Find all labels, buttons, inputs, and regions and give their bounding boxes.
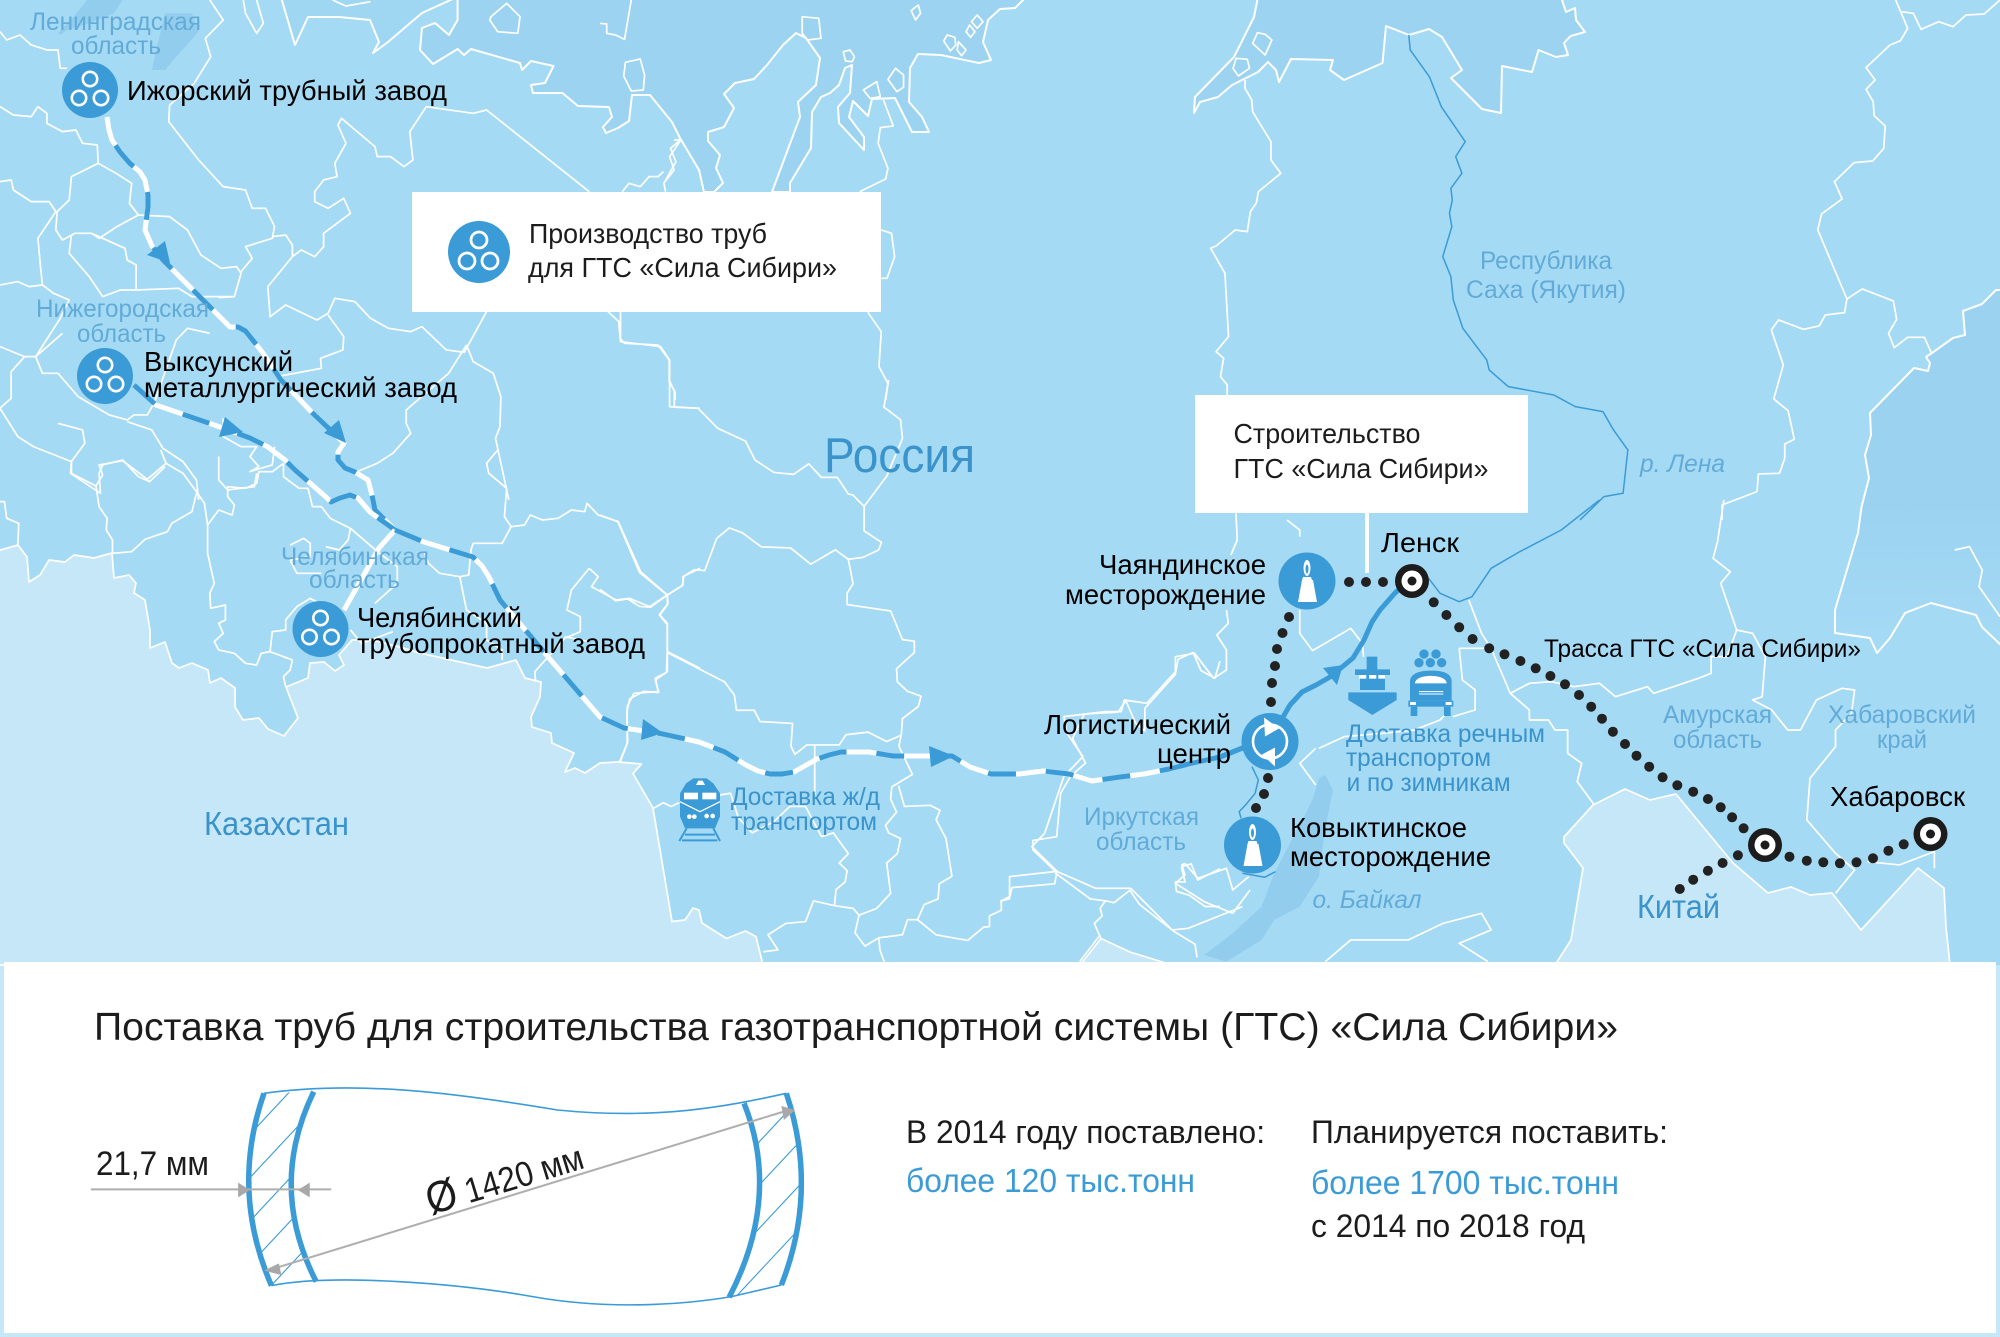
label: logistics centre: Логистический [1044, 709, 1231, 740]
label: Chelyabinsk pipe plant: трубопрокатный завод [357, 628, 645, 659]
label: lake Baikal: о. Байкал [1312, 886, 1422, 914]
label: river and winter road delivery: транспортом [1346, 744, 1491, 772]
label: rail delivery: транспортом [731, 808, 877, 836]
gas pipeline route dots [1251, 577, 1909, 894]
panel heading: Поставка труб для строительства газотранспортной системы (ГТС) «Сила Сибири» [94, 1006, 1618, 1049]
panel: pipe supply [4, 962, 1996, 1337]
stat: planned deliveries [1311, 1114, 1668, 1244]
label: Chayanda field: месторождение [1065, 579, 1266, 610]
icon: logistics centre [1242, 713, 1298, 770]
pipe cross-section diagram: Ø 1420 мм [420, 1130, 589, 1225]
label: rail delivery: Доставка ж/д [731, 783, 880, 811]
seas [281, 0, 2000, 653]
label: Vyksa steel works: металлургический завод [144, 372, 457, 403]
stat: delivered in 2014: В 2014 году поставлено: [906, 1114, 1265, 1150]
label: Kazakhstan: Казахстан [204, 805, 349, 842]
label: Leningrad region: область [71, 32, 161, 60]
label: Khabarovsk territory [1828, 701, 1976, 754]
route arrows [147, 241, 954, 767]
label: river and winter road delivery: и по зимникам [1347, 769, 1511, 797]
label: Khabarovsk territory: Хабаровский [1828, 701, 1976, 729]
label: pipeline route: Трасса ГТС «Сила Сибири» [1544, 635, 1861, 663]
label: Kovykta field: Ковыктинское [1290, 812, 1467, 843]
label: Chelyabinsk region [281, 543, 429, 594]
label: Chelyabinsk region: область [309, 566, 400, 594]
callout: pipeline construction: ГТС «Сила Сибири» [1234, 453, 1488, 484]
label: Leningrad region: Ленинградская [30, 8, 201, 36]
pipeline from Chelyabinsk plant [344, 530, 395, 610]
label: Russia: Россия [824, 429, 975, 483]
label: Izhora pipe plant: Ижорский трубный завод [127, 75, 447, 106]
label: Leningrad region [30, 8, 201, 60]
label: China: Китай [1637, 888, 1720, 925]
label: Khabarovsk territory: край [1877, 726, 1927, 754]
pipeline from Vyksa plant [134, 385, 395, 530]
icon: river ship [1348, 657, 1397, 715]
icon: pipe truck [1408, 649, 1453, 716]
river delivery route [1283, 585, 1404, 717]
stat: delivered in 2014: более 120 тыс.тонн [906, 1162, 1195, 1199]
marker: Khabarovsk [1914, 817, 1948, 851]
region borders central Siberia [600, 380, 1220, 963]
label: Vyksa steel works [144, 346, 457, 403]
label: Sakha Republic: Саха (Якутия) [1466, 276, 1626, 304]
icon: Izhora plant pipes [62, 62, 118, 118]
label: Chelyabinsk pipe plant: Челябинский [357, 602, 522, 633]
icon: Kovykta gas field [1224, 816, 1281, 874]
pipe cross-section diagram: 21,7 мм [96, 1145, 209, 1183]
pipe cross-section diagram [90, 1087, 804, 1306]
label: Lensk: Ленск [1381, 527, 1460, 558]
river Lena lower course [1239, 500, 1600, 877]
label: Amur region [1663, 701, 1772, 754]
label: Chayanda field: Чаяндинское [1099, 549, 1266, 580]
label: Amur region: Амурская [1663, 701, 1772, 729]
label: Chelyabinsk region: Челябинская [281, 543, 429, 571]
callout: pipe production [412, 192, 881, 312]
region borders Urals [0, 450, 700, 762]
label: logistics centre: центр [1157, 738, 1231, 769]
callout: pipe production: для ГТС «Сила Сибири» [528, 252, 837, 283]
map background [0, 0, 2000, 965]
callout: pipe production: Производство труб [529, 218, 767, 249]
lake Baikal [1204, 775, 1333, 962]
region borders north and islands [600, 0, 1281, 400]
China area [1555, 789, 1950, 965]
marker: China branch junction [1748, 828, 1782, 862]
stat: planned deliveries: более 1700 тыс.тонн [1311, 1164, 1619, 1201]
label: Amur region: область [1673, 726, 1762, 754]
river Lena upper course [1409, 35, 1628, 520]
icon: train [679, 778, 720, 841]
label: Chelyabinsk pipe plant [357, 602, 645, 659]
label: Nizhny Novgorod region: Нижегородская [36, 295, 209, 323]
label: Sakha Republic [1466, 247, 1626, 304]
label: Khabarovsk: Хабаровск [1830, 781, 1966, 812]
label: river and winter road delivery: Доставка речным [1346, 720, 1545, 748]
label: Kovykta field: месторождение [1290, 841, 1491, 872]
Mongolia area [1080, 938, 1172, 965]
label: Irkutsk region: Иркутская [1084, 803, 1199, 831]
stat: planned deliveries: Планируется поставить: [1311, 1114, 1668, 1150]
label: logistics centre [1044, 709, 1231, 769]
label: Vyksa steel works: Выксунский [144, 346, 293, 377]
icon: Chayanda gas field [1278, 552, 1336, 610]
trunk pipeline to logistics centre [395, 530, 1245, 781]
label: Irkutsk region: область [1096, 828, 1186, 856]
lakes Ladoga and Onega [58, 0, 199, 70]
icon: Chelyabinsk plant pipes [292, 601, 348, 657]
region borders far east [1000, 500, 2000, 962]
pipeline from Izhora plant [107, 117, 395, 530]
icon: Vyksa plant pipes [77, 348, 133, 404]
region borders Yakutia [1722, 0, 2000, 520]
label: Chayanda field [1065, 549, 1266, 610]
label: Sakha Republic: Республика [1480, 247, 1612, 275]
label: Lena river: р. Лена [1639, 450, 1725, 478]
Kazakhstan area [0, 545, 763, 965]
stat: delivered in 2014 [906, 1114, 1265, 1199]
label: Kovykta field [1290, 812, 1491, 872]
label: river and winter road delivery [1346, 720, 1545, 797]
marker: Lensk [1395, 564, 1429, 598]
callout: pipeline construction [1195, 395, 1528, 573]
label: rail delivery [731, 783, 880, 836]
stat: planned deliveries: с 2014 по 2018 год [1311, 1208, 1585, 1244]
label: Irkutsk region [1084, 803, 1199, 856]
label: Nizhny Novgorod region: область [77, 320, 166, 348]
callout: pipeline construction: Строительство [1234, 418, 1420, 449]
region borders west [0, 0, 700, 500]
label: Nizhny Novgorod region [36, 295, 209, 348]
